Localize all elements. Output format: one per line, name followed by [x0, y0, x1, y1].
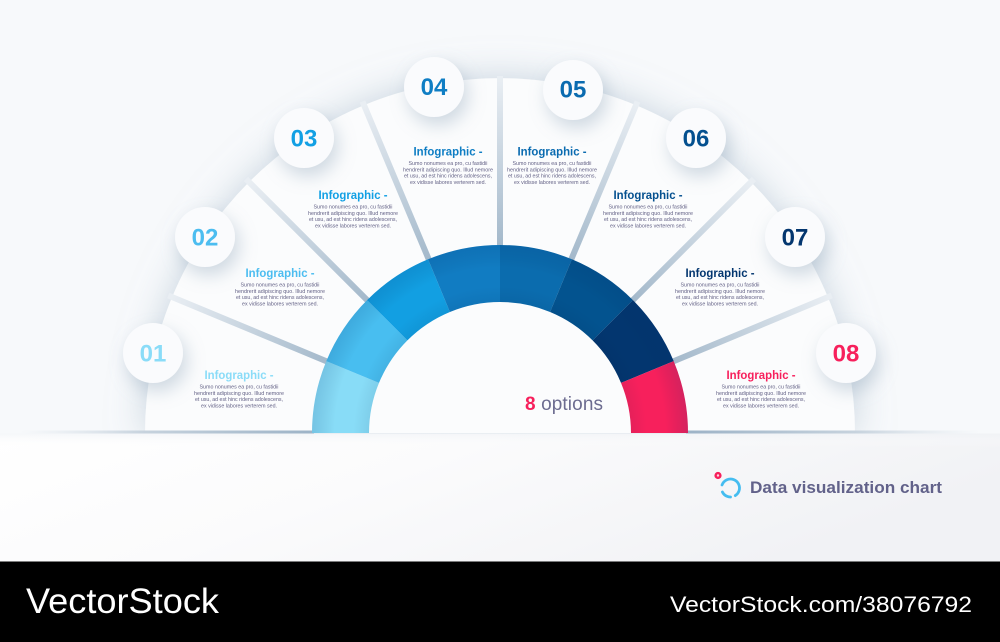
option 07	[675, 207, 825, 308]
text block 06: ex vidisse labores verterem sed.	[610, 224, 686, 230]
text block 08: ex vidisse labores verterem sed.	[723, 404, 799, 410]
option 01	[123, 323, 284, 410]
text block 07: Infographic -	[686, 266, 754, 280]
text block 05: hendrerit adipiscing quo. Illud nemore	[507, 167, 597, 173]
text block 07	[675, 266, 765, 308]
bottom panel	[0, 434, 1000, 562]
text block 04: Sumo nonumes ea pro, cu fastidii	[408, 161, 488, 167]
center label: 8 options: 8 options	[525, 394, 603, 415]
text block 08: et usu, ad est hinc ridens adolescens,	[717, 397, 805, 403]
option 08	[716, 323, 876, 410]
text block 04: Infographic -	[414, 144, 482, 158]
spoke dividers	[20, 76, 980, 434]
text block 04: ex vidisse labores verterem sed.	[410, 180, 486, 186]
badge 02	[175, 207, 235, 267]
text block 01	[194, 368, 284, 410]
text block 07: Sumo nonumes ea pro, cu fastidii	[680, 282, 760, 288]
text block 01: Infographic -	[204, 368, 274, 382]
option 03	[274, 108, 398, 230]
text block 02: ex vidisse labores verterem sed.	[242, 302, 318, 308]
icon: chart logo	[716, 473, 742, 500]
footer brand: VectorStock	[26, 582, 220, 621]
footer url: VectorStock.com/38076792	[670, 592, 972, 617]
badge 05: 05	[560, 76, 586, 104]
option 04	[403, 57, 493, 186]
text block 02: hendrerit adipiscing quo. Illud nemore	[235, 289, 325, 295]
text block 03: ex vidisse labores verterem sed.	[315, 224, 391, 230]
text block 05: Infographic -	[518, 144, 586, 158]
text block 05: Sumo nonumes ea pro, cu fastidii	[512, 161, 592, 167]
text block 07: hendrerit adipiscing quo. Illud nemore	[675, 289, 765, 295]
text block 03: Sumo nonumes ea pro, cu fastidii	[314, 204, 392, 210]
text block 06: Sumo nonumes ea pro, cu fastidii	[608, 204, 688, 210]
text block 05: et usu, ad est hinc ridens adolescens,	[508, 174, 596, 180]
badge 01: 01	[140, 340, 166, 368]
badge 07	[765, 207, 825, 267]
badge 02: 02	[192, 224, 218, 252]
text block 06: et usu, ad est hinc ridens adolescens,	[604, 217, 692, 223]
text block 01: et usu, ad est hinc ridens adolescens,	[195, 397, 283, 403]
text block 07: ex vidisse labores verterem sed.	[682, 302, 758, 308]
text block 01: hendrerit adipiscing quo. Illud nemore	[194, 391, 284, 397]
text block 02: Sumo nonumes ea pro, cu fastidii	[240, 282, 320, 288]
footer bar	[0, 562, 1000, 642]
text block 07: et usu, ad est hinc ridens adolescens,	[676, 295, 764, 301]
text block 03: et usu, ad est hinc ridens adolescens,	[309, 217, 397, 223]
badge 07: 07	[782, 224, 808, 252]
text block 04	[403, 144, 493, 186]
badge 04: 04	[421, 74, 448, 101]
background	[0, 0, 1000, 434]
text block 06	[603, 188, 693, 230]
badge 03: 03	[291, 126, 317, 152]
text block 02	[235, 266, 325, 308]
text block 03	[308, 188, 398, 230]
text block 02: et usu, ad est hinc ridens adolescens,	[236, 295, 324, 301]
option 02	[175, 207, 325, 308]
donut ring: eight coloured segments	[312, 245, 688, 433]
text block 02: Infographic -	[246, 266, 314, 280]
badge 08: 08	[833, 340, 859, 368]
text block 04: et usu, ad est hinc ridens adolescens,	[404, 174, 492, 180]
text block 08	[716, 368, 806, 410]
text block 06: Infographic -	[614, 188, 682, 202]
text block 04: hendrerit adipiscing quo. Illud nemore	[403, 167, 493, 173]
text block 08: Sumo nonumes ea pro, cu fastidii	[722, 384, 800, 390]
text block 01: Sumo nonumes ea pro, cu fastidii	[200, 384, 278, 390]
text block 05: ex vidisse labores verterem sed.	[514, 180, 590, 186]
text block 06: hendrerit adipiscing quo. Illud nemore	[603, 211, 693, 217]
text block 03: Infographic -	[318, 188, 388, 202]
text block 08: Infographic -	[726, 368, 796, 382]
text block 01: ex vidisse labores verterem sed.	[201, 404, 277, 410]
badge 08	[816, 323, 876, 383]
option 05	[507, 60, 603, 186]
text block 03: hendrerit adipiscing quo. Illud nemore	[308, 211, 398, 217]
badge 06: 06	[683, 126, 709, 152]
option 06	[603, 108, 726, 230]
logo caption: Data visualization chart	[750, 478, 942, 497]
text block 08: hendrerit adipiscing quo. Illud nemore	[716, 391, 806, 397]
semicircular fan panel	[20, 76, 980, 434]
badge 01	[123, 323, 183, 383]
text block 05	[507, 144, 597, 186]
